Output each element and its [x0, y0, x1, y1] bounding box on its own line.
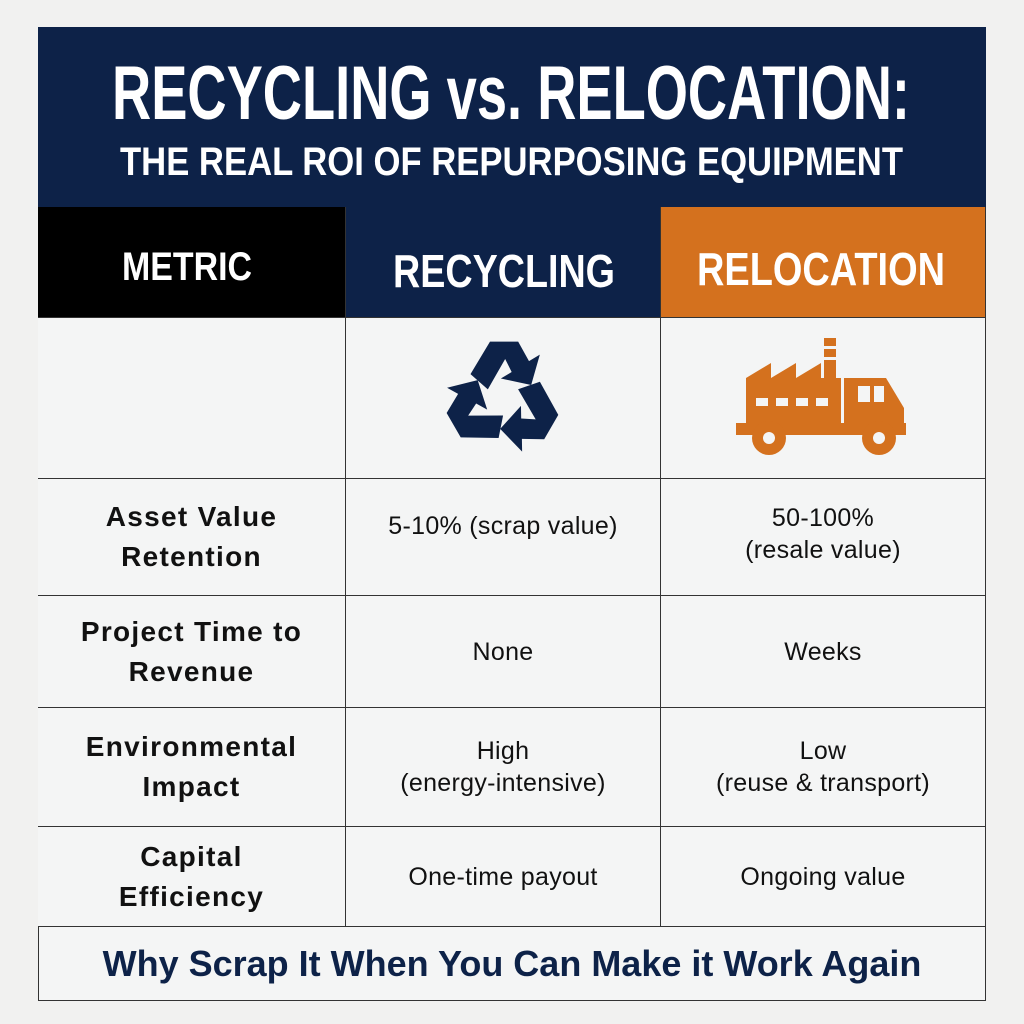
footer tagline: Why Scrap It When You Can Make it Work Again [103, 943, 921, 984]
row: time: Project Time to [81, 616, 302, 646]
row: environmental [38, 708, 985, 827]
row: time: Weeks [784, 638, 862, 666]
row: time: None [473, 638, 533, 666]
row: capital: Efficiency [119, 880, 264, 912]
row: environmental: Low [800, 737, 846, 765]
row: asset value: (resale value) [745, 536, 901, 564]
header: recycling: RECYCLING [393, 244, 615, 296]
row: environmental: Impact [142, 771, 241, 802]
header: metric: METRIC [122, 244, 252, 288]
row: time: Revenue [129, 656, 254, 686]
row: capital: One-time payout [408, 862, 598, 890]
row: asset value: Asset Value [106, 501, 277, 532]
icon: truck factory [661, 318, 986, 479]
row: environmental: Environmental [86, 731, 297, 762]
row: asset value [38, 479, 985, 596]
title band [38, 27, 986, 208]
row: time [38, 596, 985, 708]
header: recycling [346, 207, 661, 318]
header: metric [38, 207, 346, 318]
row: asset value: 5-10% (scrap value) [388, 512, 618, 540]
row: asset value: 50-100% [772, 504, 874, 532]
header: relocation [661, 207, 986, 318]
row: asset value: Retention [121, 541, 262, 572]
icon: recycle [346, 318, 661, 479]
row: environmental: (energy-intensive) [400, 769, 606, 797]
row: capital: Capital [140, 840, 243, 872]
row: capital [38, 827, 985, 927]
row: environmental: High [477, 737, 529, 765]
row: environmental: (reuse & transport) [716, 769, 930, 797]
row: capital: Ongoing value [740, 862, 906, 890]
